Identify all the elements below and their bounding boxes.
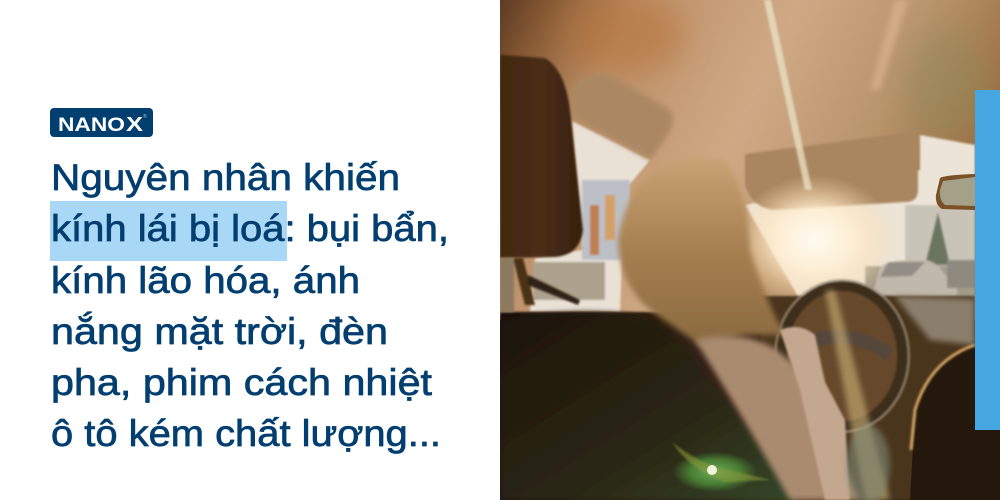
headline text: nắng mặt trời, đèn bbox=[51, 311, 388, 352]
windshield and street view bbox=[745, 135, 975, 300]
right passenger seat bbox=[910, 345, 976, 500]
front seat headrest bbox=[500, 55, 583, 258]
photo: driver in car facing the sun bbox=[500, 0, 1000, 500]
light streak over steering wheel bbox=[825, 290, 890, 500]
headline text bbox=[51, 157, 449, 454]
car ceiling bbox=[500, 0, 1000, 320]
headline text: kính lão hóa, ánh bbox=[51, 260, 360, 301]
headrest posts and seat belt bbox=[500, 258, 580, 312]
sun visor bbox=[745, 133, 918, 210]
driver hand bbox=[780, 327, 850, 500]
headline text: ô tô kém chất lượng... bbox=[51, 413, 441, 454]
grab handle bbox=[572, 74, 673, 160]
headline text: Nguyên nhân khiến bbox=[51, 157, 400, 198]
left text panel background bbox=[0, 0, 500, 500]
photo base bbox=[500, 320, 975, 500]
light streak top bbox=[764, 0, 812, 190]
rear and lower cabin shadow bbox=[500, 310, 758, 404]
logo: NANOX badge: NANO bbox=[58, 115, 125, 136]
dashboard bbox=[760, 296, 975, 500]
driver back and sleeve bbox=[695, 336, 860, 500]
lens flare bbox=[672, 442, 770, 492]
driver hair and shoulders bbox=[618, 157, 785, 345]
headline text: pha, phim cách nhiệt bbox=[51, 362, 433, 403]
sun glare bbox=[748, 179, 886, 296]
green tint on ceiling bbox=[903, 32, 975, 130]
logo: NANOX badge bbox=[50, 108, 153, 137]
highlight behind kính lái bị loá bbox=[50, 201, 287, 261]
logo: NANOX badge: X bbox=[126, 114, 144, 136]
teal flare spot bbox=[846, 425, 890, 500]
orange glow on ceiling bbox=[565, 0, 685, 75]
passenger seat back bbox=[500, 312, 800, 500]
light streak upper right bbox=[870, 0, 908, 90]
side window bbox=[530, 121, 650, 312]
logo: NANOX badge: ® bbox=[143, 113, 147, 120]
rear view mirror bbox=[936, 174, 975, 210]
headline text: kính lái bị loá: bụi bẩn, bbox=[51, 208, 449, 249]
steering wheel bbox=[775, 280, 909, 432]
blue accent bar bbox=[975, 90, 1000, 430]
